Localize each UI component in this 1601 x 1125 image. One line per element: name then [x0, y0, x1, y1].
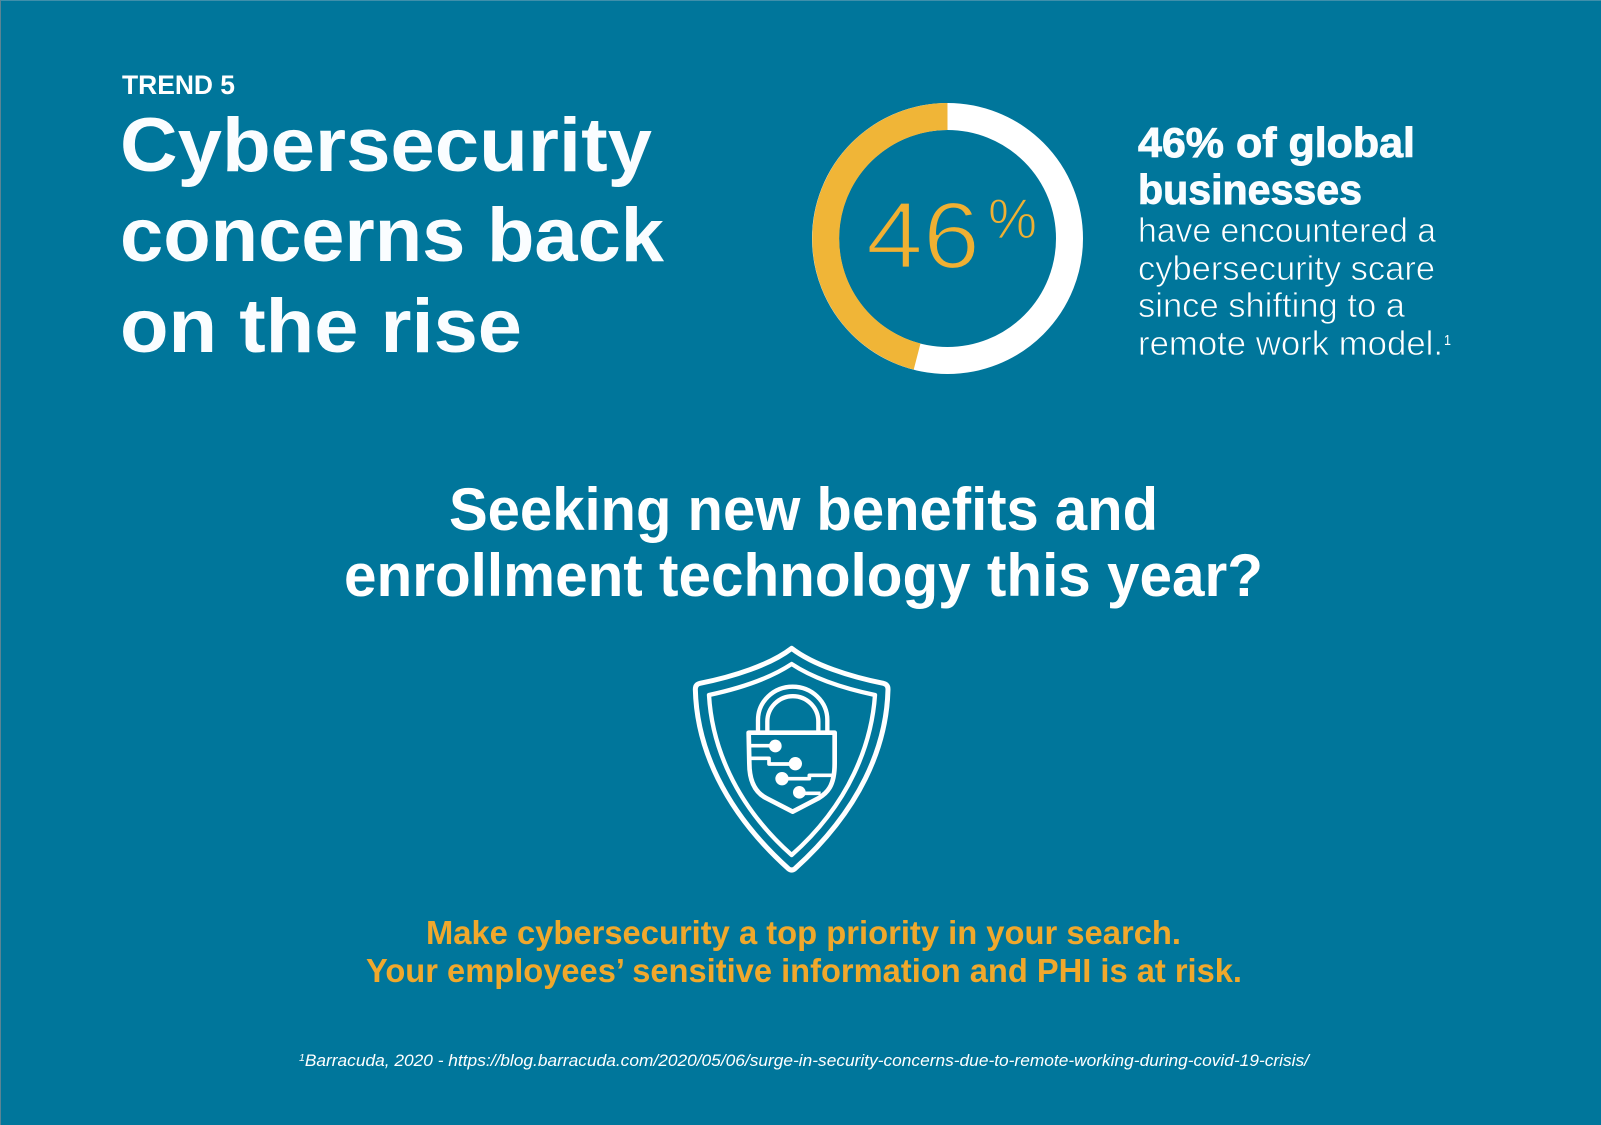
title: on the rise [120, 284, 522, 369]
headline question [344, 476, 1263, 609]
title: concerns back [120, 193, 665, 278]
icon: shield with circuit padlock [695, 648, 888, 870]
call to action: Make cybersecurity a top priority in your search. [426, 914, 1181, 951]
call to action [366, 914, 1242, 989]
statistic text: remote work model. [1138, 325, 1443, 363]
statistic text: cybersecurity scare [1138, 250, 1435, 288]
footnote: Barracuda, 2020 - https://blog.barracuda.com/2020/05/06/surge-in-security-concerns-due-to-remote-working-during-covid-19-crisis/ [305, 1052, 1310, 1070]
trend label: TREND 5 [122, 70, 235, 100]
donut chart: 46 percent: % [988, 187, 1037, 251]
title [120, 103, 665, 369]
donut chart: 46 percent: 46 [866, 183, 980, 289]
statistic text: 1 [1444, 332, 1451, 349]
statistic text: businesses [1138, 166, 1362, 213]
footnote: 1 [299, 1053, 305, 1064]
headline question: Seeking new benefits and [449, 476, 1158, 543]
call to action: Your employees’ sensitive information and PHI is at risk. [366, 952, 1242, 989]
title: Cybersecurity [120, 103, 652, 188]
donut chart: 46 percent [826, 116, 1070, 360]
statistic text: have encountered a [1138, 212, 1436, 250]
statistic text [1138, 119, 1451, 363]
statistic text: since shifting to a [1138, 287, 1405, 325]
statistic text: 46% of global [1138, 119, 1415, 166]
headline question: enrollment technology this year? [344, 542, 1263, 609]
